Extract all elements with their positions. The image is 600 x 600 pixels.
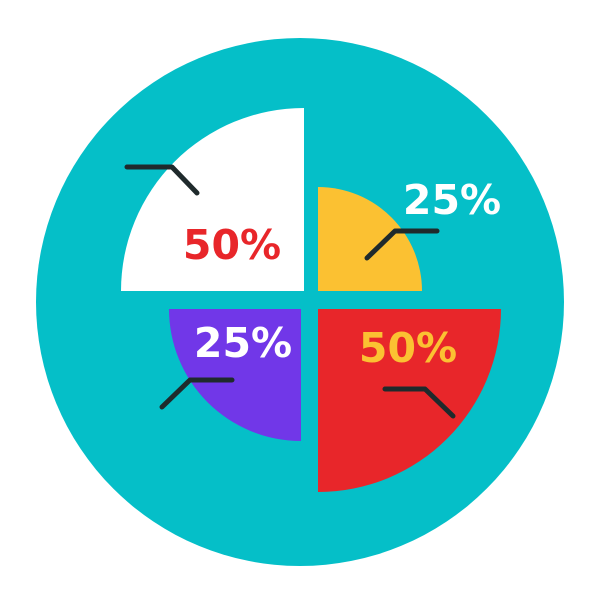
background circle	[36, 38, 564, 566]
leader line: purple slice	[162, 380, 232, 407]
label: 50% red: 50%	[183, 221, 281, 269]
leader line: white slice	[127, 167, 197, 193]
label: 25% white: 25%	[403, 176, 501, 224]
slice: red 50%	[318, 309, 501, 492]
slice: white 50%	[121, 108, 304, 291]
leader line: red slice	[385, 389, 453, 416]
leader line: yellow slice	[367, 231, 437, 258]
label: 50% yellow: 50%	[359, 324, 457, 372]
slice: yellow 25%	[318, 176, 501, 291]
label: 25% white: 25%	[194, 319, 292, 367]
slice: purple 25%	[162, 309, 301, 441]
